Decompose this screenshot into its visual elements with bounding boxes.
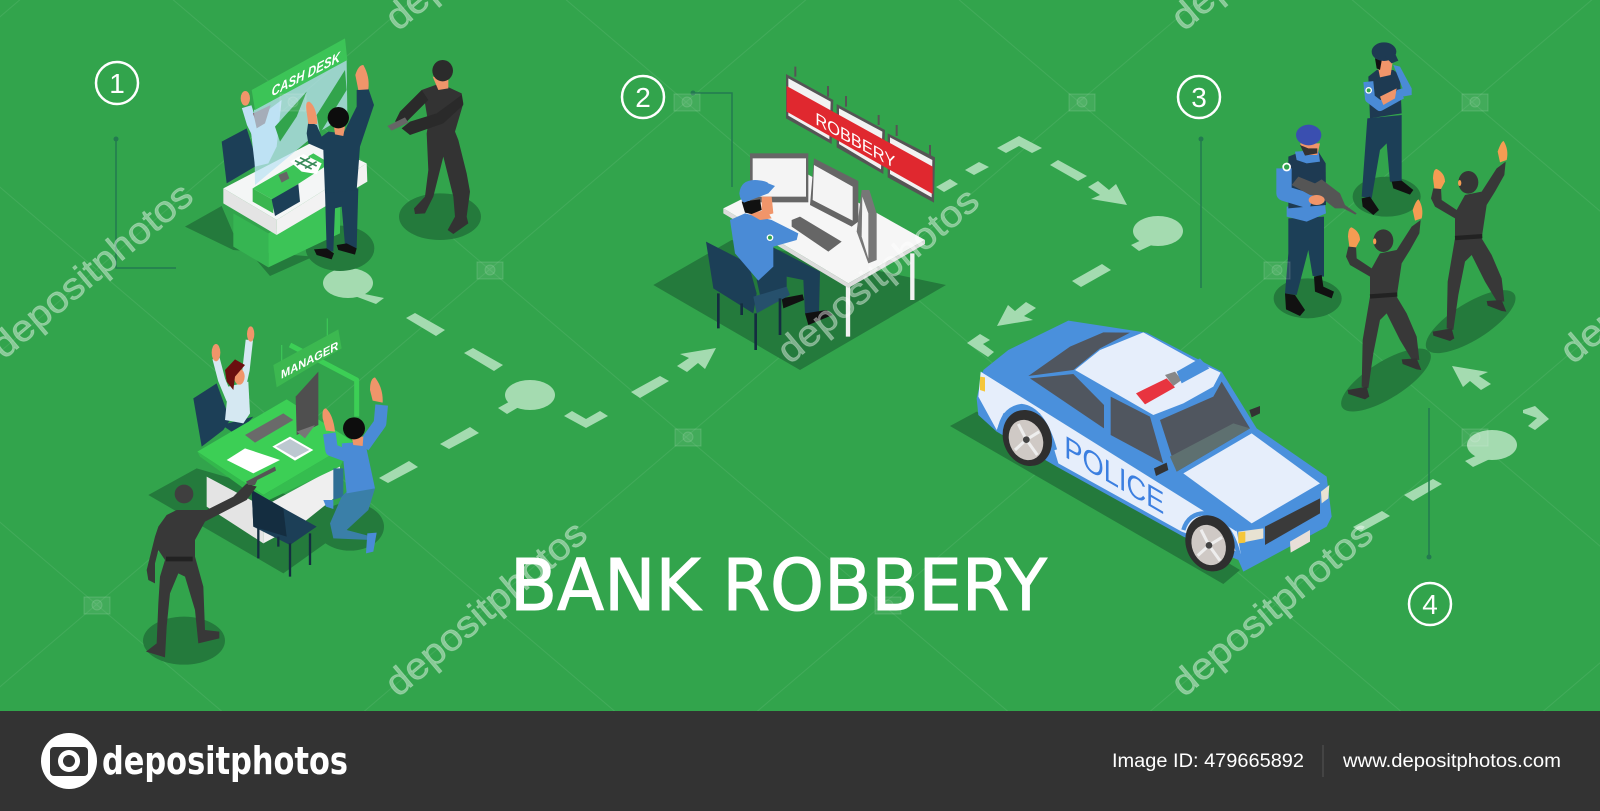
- white side panel: [978, 372, 1241, 553]
- shadows: [185, 193, 481, 276]
- shadow: [653, 240, 946, 370]
- robbery alarm sign: ROBBERY: [815, 108, 896, 173]
- shadows: [143, 468, 384, 665]
- title: BANK ROBBERY: [510, 544, 1048, 627]
- police lettering: POLICE: [1064, 429, 1164, 522]
- wheels: [994, 402, 1243, 579]
- callout 1: number and leader line: 1: [109, 68, 125, 99]
- guard and chair: [706, 180, 833, 350]
- teller woman and chair: [222, 91, 282, 183]
- scene 2: manager office: [143, 318, 384, 665]
- robbery alarm sign: [786, 67, 935, 203]
- wheel arches: [999, 406, 1238, 553]
- shadows: [1274, 177, 1524, 423]
- robber with pistol: [387, 60, 470, 234]
- manager sign: [273, 318, 357, 417]
- cash desk: [223, 140, 367, 267]
- callout 3: number and leader line: 3: [1191, 82, 1207, 113]
- sign: cash desk: [252, 38, 347, 110]
- watermark overlay: depositphotos: [769, 179, 987, 371]
- monitors and keyboard: [750, 153, 877, 263]
- roof: [1075, 332, 1221, 415]
- callout 3: number and leader line: [1178, 76, 1220, 288]
- footer url: www.depositphotos.com: [1342, 751, 1561, 772]
- manager desk: [197, 372, 353, 543]
- callout 2: number and leader line: [622, 76, 732, 187]
- scene 3: security guard room: [653, 67, 946, 370]
- callout 2: number and leader line: 2: [635, 82, 651, 113]
- flow path: dashed route with arrows and bubbles: [323, 136, 1549, 532]
- footer logo: depositphotos: [41, 733, 348, 789]
- surrendering robber: front: [1346, 199, 1422, 399]
- kneeling man: [322, 377, 383, 553]
- light bar: [1136, 358, 1209, 404]
- visitor chair: [252, 490, 317, 577]
- windows: [1028, 332, 1250, 472]
- glass partition: [254, 60, 347, 185]
- surrendering robber: rear: [1431, 141, 1507, 341]
- car shadow: [950, 412, 1240, 584]
- watermark camera icons: [84, 94, 1488, 614]
- robber from behind with pistol: [146, 467, 276, 657]
- security desk: [723, 170, 925, 337]
- man with hands up: [306, 65, 374, 259]
- manager sign: MANAGER: [281, 338, 338, 382]
- sign: cash desk: CASH DESK: [272, 49, 341, 100]
- footer image id: Image ID: 479665892: [1112, 751, 1304, 772]
- watermark overlay: depositphotos: [377, 512, 595, 704]
- hood: [1183, 433, 1320, 523]
- footer bar: [0, 711, 1600, 811]
- woman manager and chair: [193, 326, 254, 447]
- armed officer with helmet: [1282, 125, 1357, 316]
- footer logo: depositphotos: depositphotos: [102, 739, 348, 783]
- police car: [950, 321, 1332, 584]
- watermark overlay: depositphotos: [1163, 512, 1381, 704]
- callout 1: number and leader line: [96, 62, 176, 268]
- scene 4: police arrest robbers: [1274, 42, 1524, 423]
- front grille and lights: [980, 377, 1329, 553]
- car body: [977, 321, 1332, 572]
- police officer with crossed arms: [1362, 42, 1413, 215]
- scene 1: cash desk robbery: [185, 38, 481, 276]
- callout 4: number and leader line: 4: [1422, 589, 1438, 620]
- callout 4: number and leader line: [1409, 408, 1451, 625]
